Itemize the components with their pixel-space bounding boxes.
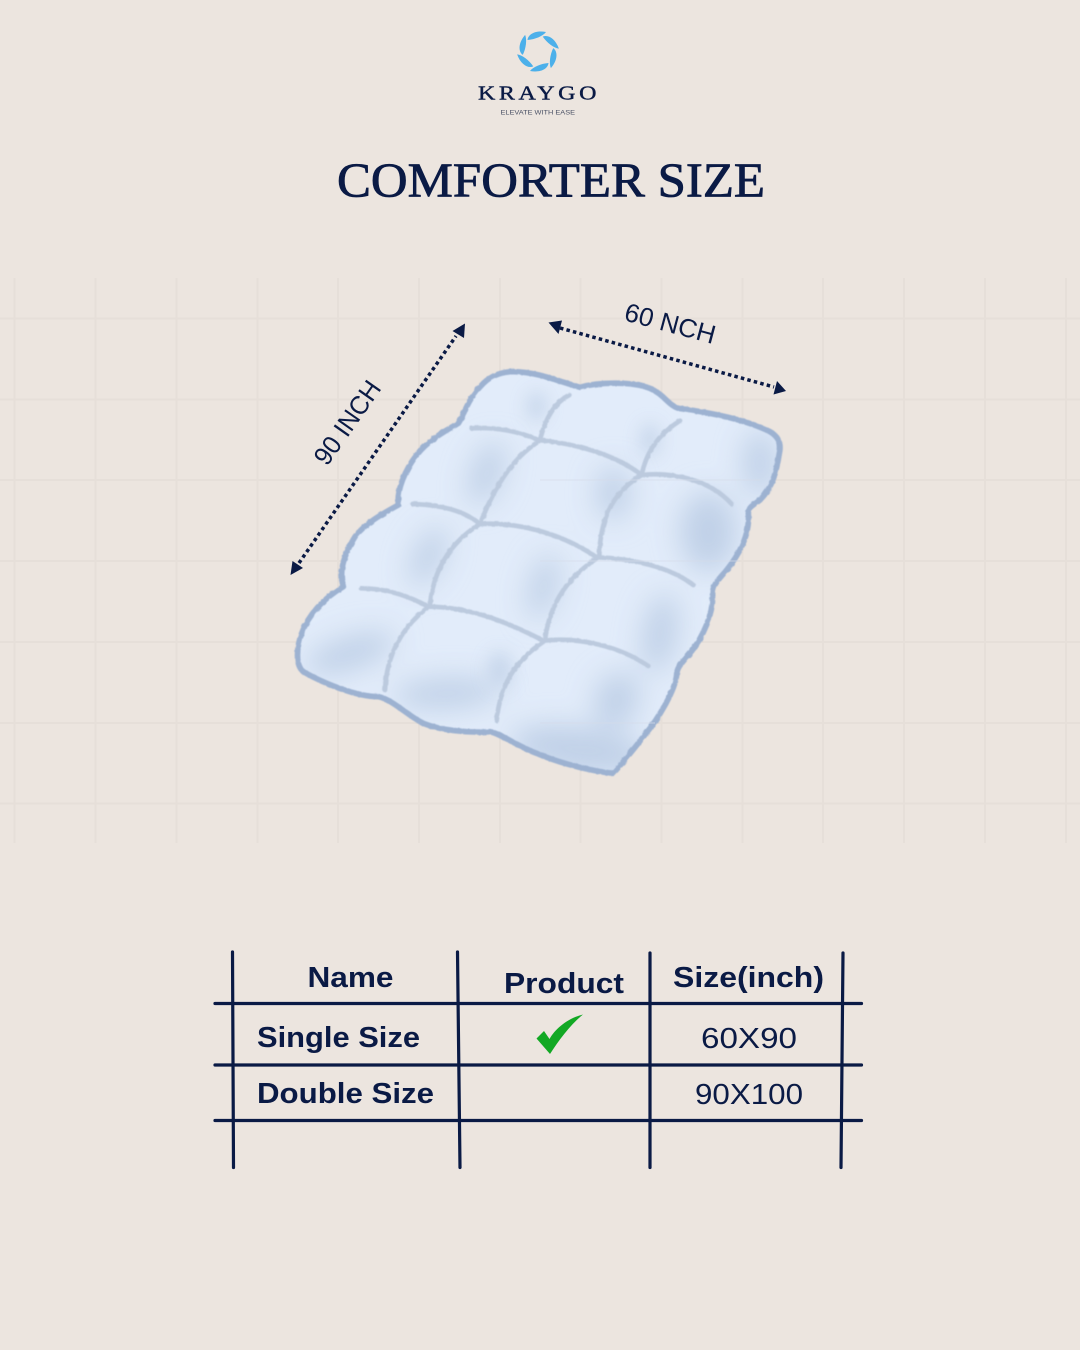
- title: COMFORTER SIZE: [337, 152, 765, 208]
- row label: Double Size: Double Size: [257, 1078, 434, 1110]
- header: Product: Product: [504, 968, 624, 1000]
- header: Name: Name: [308, 962, 394, 994]
- comforter outline: [297, 372, 780, 773]
- background grid: [0, 278, 1080, 843]
- row label: Single Size: Single Size: [257, 1022, 420, 1054]
- value: 90X100: 90X100: [695, 1079, 803, 1111]
- header: Size(inch): Size(inch): [673, 962, 824, 994]
- tagline: ELEVATE WITH EASE: [500, 110, 576, 116]
- icon: green check mark: [536, 1014, 583, 1054]
- label: 90 INCH: 90 INCH: [307, 375, 387, 470]
- table grid lines: [215, 952, 862, 1168]
- arrow: 90 inch dimension: [290, 324, 465, 575]
- brand name: KRAYGO: [478, 82, 600, 104]
- faint grid over comforter: [540, 480, 760, 723]
- icon: logo ring of leaves: [515, 32, 561, 71]
- comforter shading: [301, 392, 777, 783]
- arrow: 60 inch dimension: [548, 320, 786, 394]
- label: 60 NCH: 60 NCH: [621, 297, 719, 350]
- comforter illustration: [280, 350, 800, 790]
- comforter body: [300, 374, 777, 770]
- logo: Kraygo: [478, 32, 600, 117]
- comforter seams: [361, 395, 732, 721]
- value: 60X90: 60X90: [701, 1023, 797, 1055]
- size table: [215, 952, 862, 1168]
